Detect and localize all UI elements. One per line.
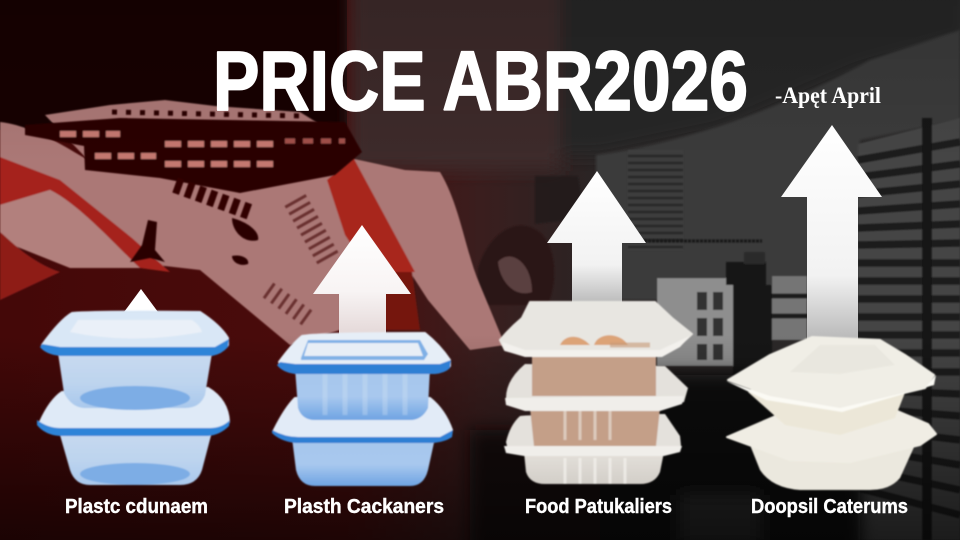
red sash left bbox=[0, 157, 170, 272]
container stack: plastic containers bbox=[37, 312, 230, 485]
container stack: plastic packaging bbox=[272, 333, 453, 486]
background: scarf body bbox=[0, 100, 505, 350]
background: central pale building with windows bbox=[628, 241, 807, 400]
background: hard hat figure bbox=[478, 176, 585, 305]
label: food packaging: Food Patukaliers bbox=[525, 496, 672, 518]
background: curtain and pale wall bbox=[350, 0, 960, 170]
arrow 1 bbox=[124, 289, 158, 312]
background: scarf black cord band bbox=[25, 112, 362, 320]
background: dark upper left bbox=[0, 0, 347, 130]
date subtitle: -Apęt April bbox=[775, 83, 881, 108]
label: plastic containers: Plastc cdunaem bbox=[65, 496, 208, 518]
label: disposable containers: Doopsil Caterums bbox=[751, 496, 908, 518]
background: window blinds bbox=[628, 150, 683, 250]
background: light wall bbox=[596, 30, 960, 300]
title: PRICE ABR2026 bbox=[213, 34, 748, 128]
background: right slatted building bbox=[858, 118, 960, 540]
container stack: disposable containers bbox=[726, 337, 936, 490]
background: dark lower floor bbox=[470, 375, 860, 540]
arrow 3 bbox=[547, 171, 646, 305]
red strap bbox=[327, 157, 415, 272]
container stack: food packaging bbox=[500, 302, 692, 484]
arrow 2 bbox=[313, 225, 411, 335]
arrow 4 bbox=[781, 125, 882, 340]
label: plastic packaging: Plasth Cackaners bbox=[284, 496, 444, 518]
